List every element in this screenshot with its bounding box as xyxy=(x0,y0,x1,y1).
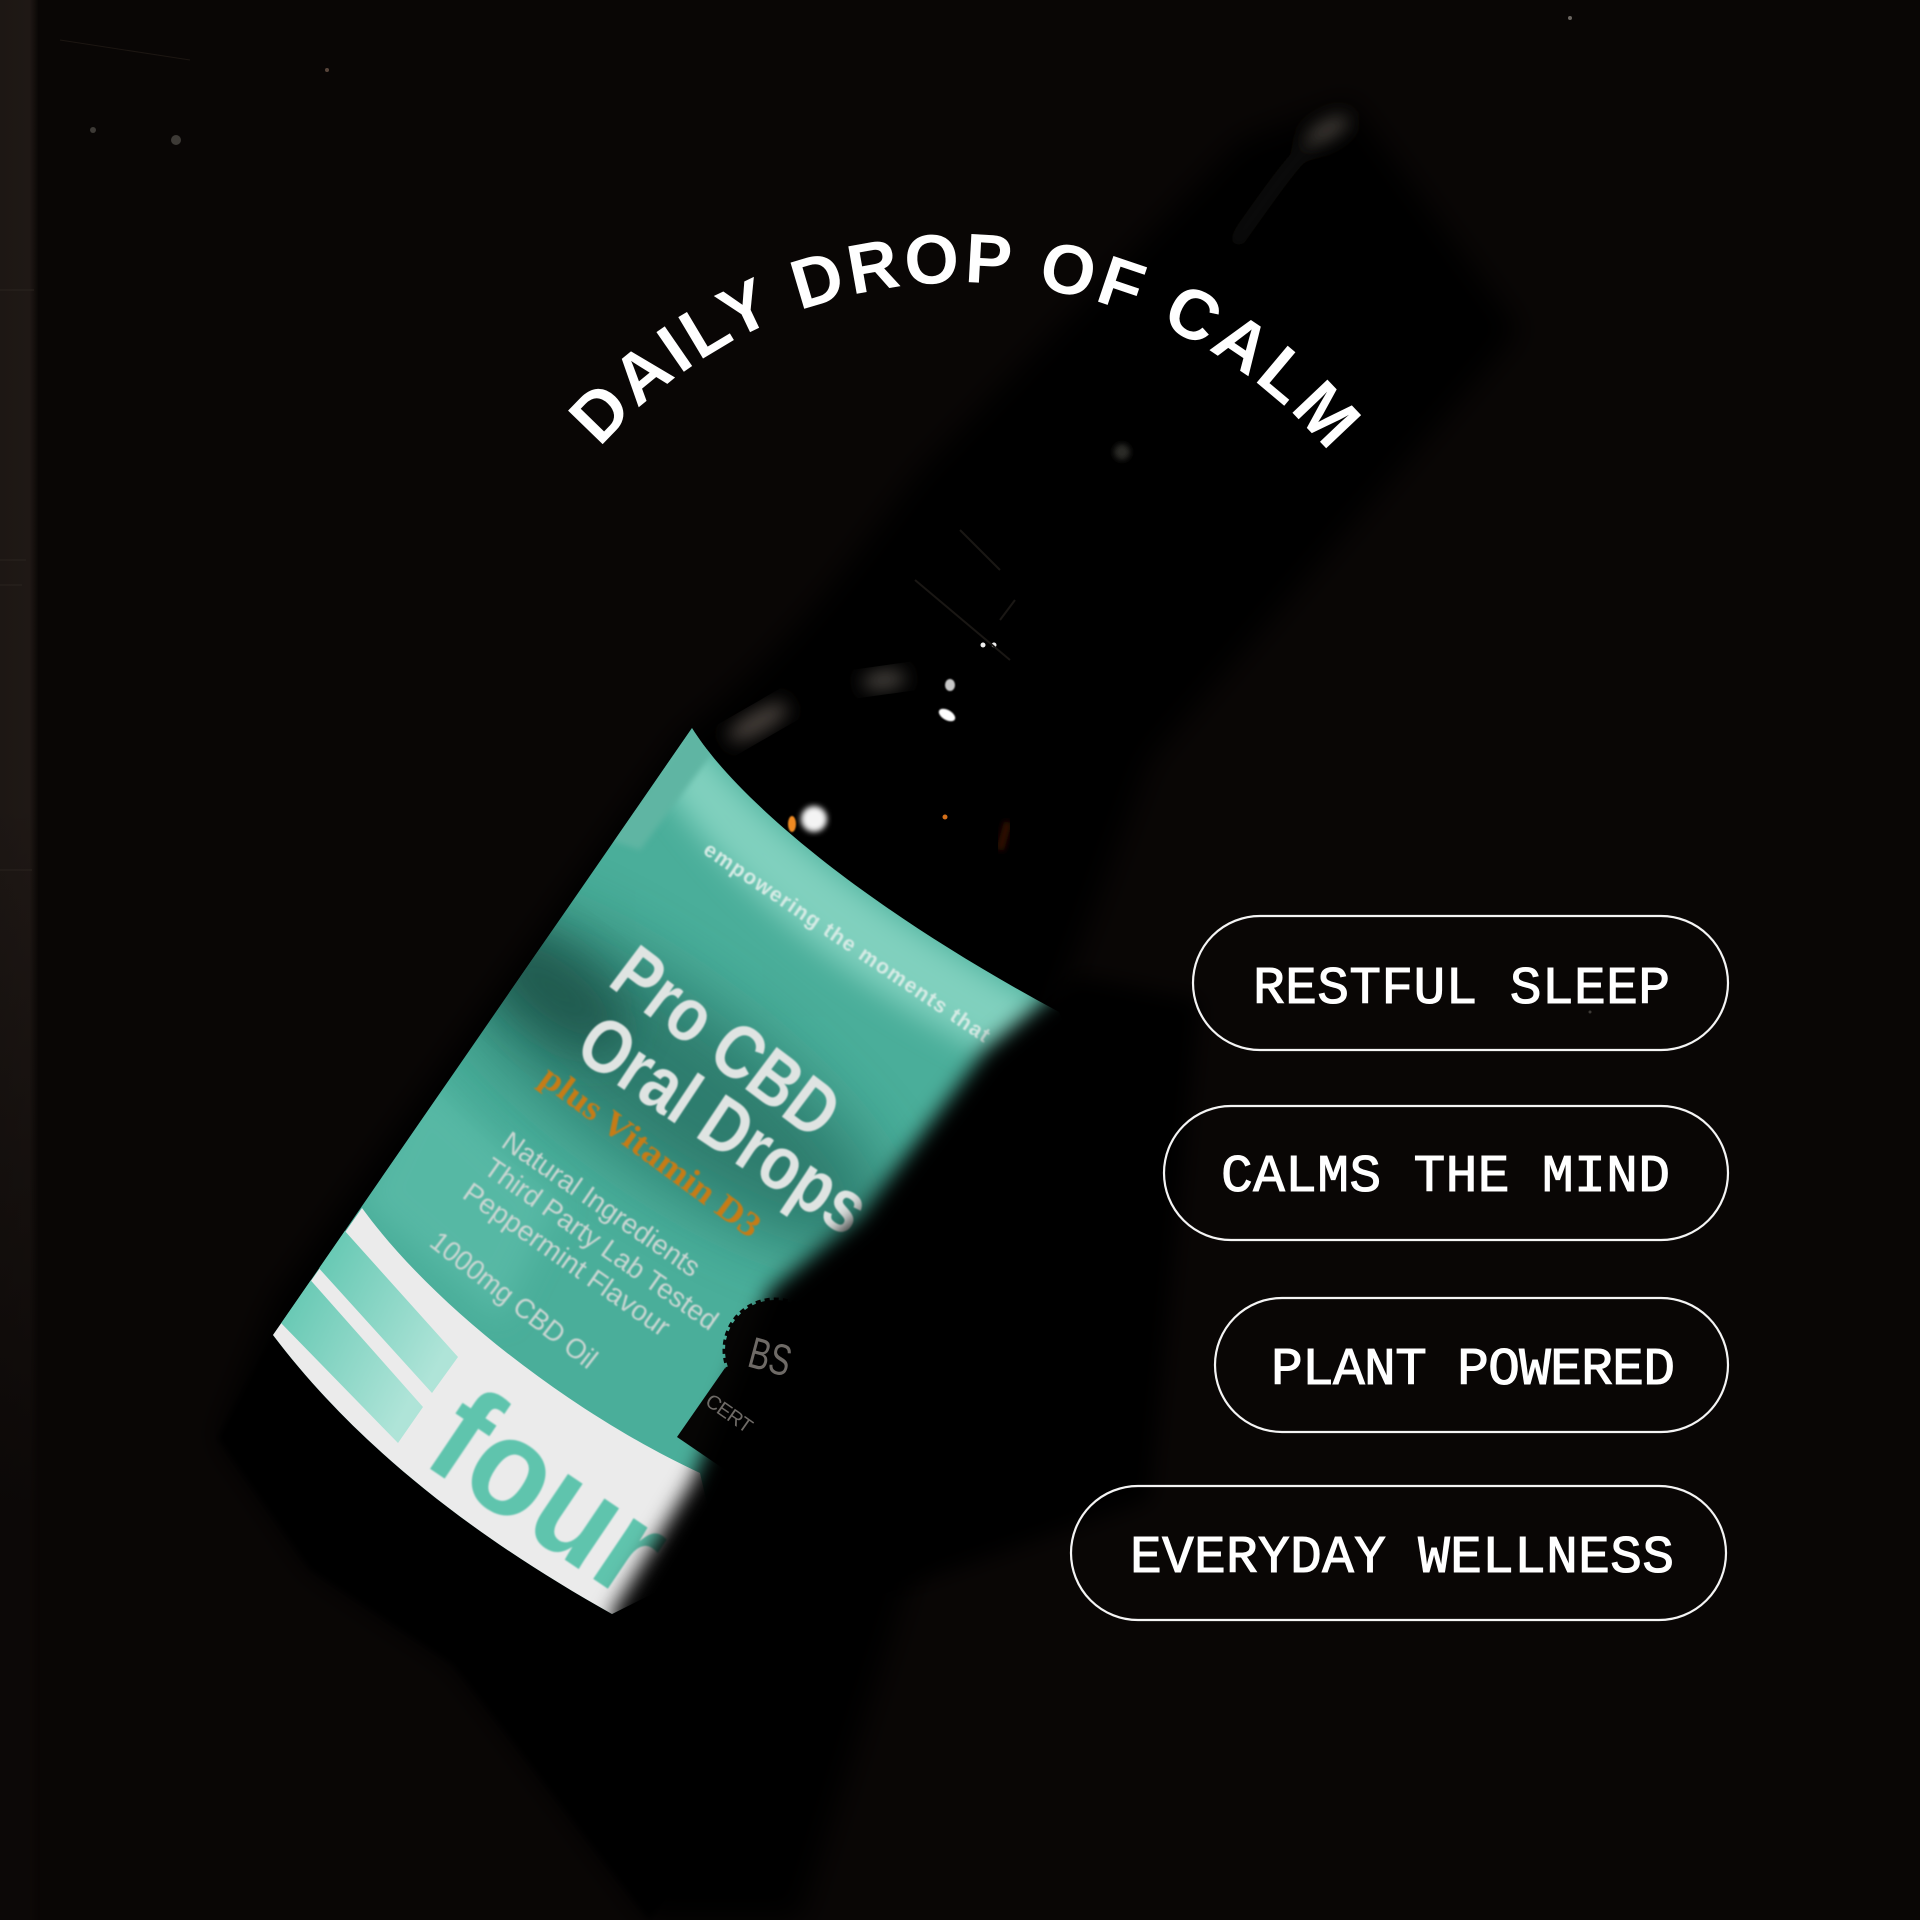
feature list xyxy=(424,1125,724,1375)
badge lettering: CERT xyxy=(701,1390,756,1438)
logo stripe upper xyxy=(316,1230,458,1393)
bottle silhouette xyxy=(218,100,1520,1920)
logo stripes xyxy=(280,1230,458,1443)
dust specks xyxy=(90,16,1592,1014)
vitamin subtitle: plus Vitamin D3 xyxy=(533,1057,769,1245)
hard shadow over label xyxy=(610,975,1200,1680)
pill: calms the mind: CALMS THE MIND xyxy=(1221,1147,1670,1207)
pill: plant powered: PLANT POWERED xyxy=(1271,1340,1675,1400)
feature list: Peppermint Flavour xyxy=(458,1177,676,1342)
certification badge xyxy=(677,1300,825,1480)
panel: product label xyxy=(273,728,1182,1614)
badge lettering: BS xyxy=(743,1328,797,1387)
title arc: DAILY DROP OF CALM xyxy=(568,234,1361,448)
brand wordmark: four xyxy=(403,1359,697,1627)
product name xyxy=(563,930,884,1252)
pill: everyday wellness xyxy=(1071,1486,1726,1620)
pill: calms the mind xyxy=(1164,1106,1728,1240)
left edge streaked strip xyxy=(0,0,190,1920)
dropper cap highlight xyxy=(1233,110,1352,245)
pill: restful sleep: RESTFUL SLEEP xyxy=(1253,959,1670,1019)
product name: Pro CBD xyxy=(596,930,856,1155)
bottle base xyxy=(218,1335,760,1920)
product name: Oral Drops xyxy=(563,998,884,1252)
pill: restful sleep xyxy=(1193,916,1728,1050)
feature list: 1000mg CBD Oil xyxy=(424,1225,603,1375)
feature list: Third Party Lab Tested xyxy=(479,1152,724,1336)
logo stripe lower xyxy=(280,1275,423,1443)
pill: everyday wellness: EVERYDAY WELLNESS xyxy=(1130,1528,1674,1588)
neck glints xyxy=(723,444,1130,850)
white base band xyxy=(273,1208,720,1614)
badge lettering xyxy=(701,1328,797,1438)
tagline: empowering the moments that xyxy=(699,838,994,1047)
feature list: Natural Ingredients xyxy=(497,1125,706,1283)
pill: plant powered xyxy=(1215,1298,1728,1432)
label teal paper xyxy=(273,728,1057,1614)
